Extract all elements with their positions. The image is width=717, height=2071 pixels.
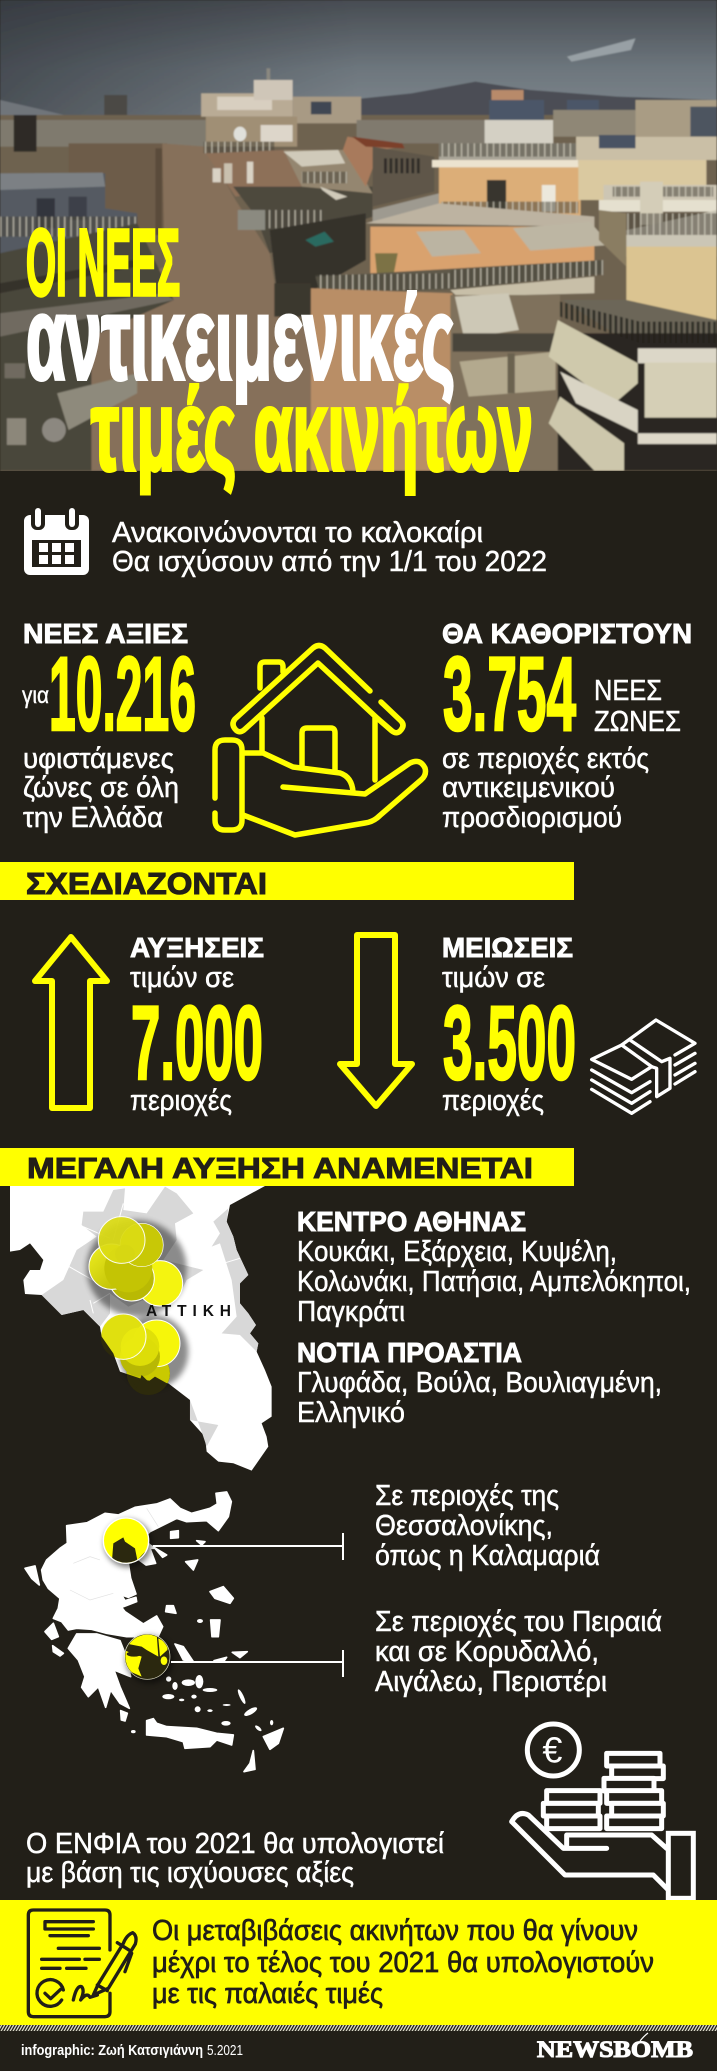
decorative hatch strip: [0, 2025, 717, 2031]
panel: new zones: 3.754: [443, 636, 576, 753]
text: central Athens and southern suburbs: [297, 1206, 691, 1429]
text: Thessaloniki areas: όπως η Καλαμαριά: [375, 1540, 600, 1572]
panel: new zones: προσδιορισμού: [442, 802, 622, 834]
icon: hand with euro coins: [512, 1724, 693, 1898]
logo: Newsbomb: NEWSBOMB: [537, 2037, 693, 2062]
text: ENFIA note: Ο ΕΝΦΙΑ του 2021 θα υπολογιστεί: [26, 1828, 445, 1860]
text: central Athens and southern suburbs: Κουκάκι, Εξάρχεια, Κυψέλη,: [297, 1236, 617, 1268]
panel: decreases: ΜΕΙΩΣΕΙΣ: [442, 932, 573, 963]
panel: new values: ζώνες σε όλη: [23, 772, 179, 804]
panel: new zones: ΘΑ ΚΑΘΟΡΙΣΤΟΥΝ: [442, 618, 692, 649]
panel: increases: περιοχές: [130, 1085, 232, 1117]
leader line: Thessaloniki: [153, 1533, 343, 1560]
arrow: down: [340, 935, 412, 1106]
map: Greece: [25, 1492, 283, 1772]
icon: stack of banknotes: [592, 1020, 695, 1113]
announcement text: Ανακοινώνονται το καλοκαίρι: [112, 517, 483, 549]
text: central Athens and southern suburbs: ΚΕΝΤΡΟ ΑΘΗΝΑΣ: [297, 1206, 526, 1237]
panel: new zones: αντικειμενικού: [442, 772, 615, 804]
text: Piraeus areas: Αιγάλεω, Περιστέρι: [375, 1666, 607, 1698]
panel: new values: [22, 618, 196, 834]
panel: new zones: ΝΕΕΣ: [594, 675, 662, 707]
announcement text: Θα ισχύσουν από την 1/1 του 2022: [112, 546, 547, 578]
leader line: Piraeus: [171, 1650, 343, 1677]
text: central Athens and southern suburbs: Παγκράτι: [297, 1296, 405, 1328]
text: central Athens and southern suburbs: Γλυφάδα, Βούλα, Βουλιαγμένη,: [297, 1367, 662, 1399]
text: Thessaloniki areas: Θεσσαλονίκης,: [375, 1510, 553, 1542]
text: central Athens and southern suburbs: ΝΟΤΙΑ ΠΡΟΑΣΤΙΑ: [297, 1337, 522, 1368]
panel: decreases: τιμών σε: [442, 962, 545, 994]
infographic canvas: 10.216: [49, 636, 196, 753]
icon: calendar: [24, 506, 89, 575]
panel: increases: [130, 932, 264, 1117]
heading band: big increase expected: [0, 1148, 574, 1186]
panel: new zones: ΖΩΝΕΣ: [594, 706, 681, 738]
panel: decreases: περιοχές: [442, 1085, 544, 1117]
heading band: big increase expected: ΜΕΓΑΛΗ ΑΥΞΗΣΗ ΑΝΑΜΕΝΕΤΑΙ: [27, 1153, 533, 1185]
panel: increases: τιμών σε: [130, 962, 234, 994]
panel: decreases: [442, 932, 576, 1117]
panel: new values: υφιστάμενες: [23, 743, 174, 775]
panel: property transfers note: με τις παλαιές τιμές: [152, 1978, 383, 2010]
map: Attica with highlighted areas: [10, 1186, 272, 1471]
text: Piraeus areas: Σε περιοχές του Πειραιά: [375, 1606, 662, 1638]
text: ENFIA note: [26, 1828, 445, 1889]
heading band: planned: [0, 862, 574, 901]
text: Piraeus areas: και σε Κορυδαλλό,: [375, 1636, 599, 1668]
panel: new values: ΝΕΕΣ ΑΞΙΕΣ: [23, 618, 188, 649]
panel: new zones: [442, 618, 692, 834]
arrow: up: [35, 937, 107, 1108]
credit: infographic: Ζωή Κατσιγιάννη: [21, 2043, 203, 2059]
text: Piraeus areas: [375, 1606, 662, 1698]
heading band: planned: ΣΧΕΔΙΑΖΟΝΤΑΙ: [26, 866, 267, 901]
text: central Athens and southern suburbs: Ελληνικό: [297, 1397, 405, 1429]
panel: decreases: 3.500: [443, 985, 576, 1102]
panel: new zones: σε περιοχές εκτός: [442, 743, 649, 775]
icon: house on hand: [215, 646, 426, 835]
text: Thessaloniki areas: [375, 1480, 600, 1572]
title: [26, 210, 533, 495]
panel: property transfers note: μέχρι το τέλος του 2021 θα υπολογιστούν: [152, 1947, 654, 1979]
panel: new values: για: [22, 682, 49, 708]
panel: property transfers note: [0, 1900, 717, 2025]
map label: Attica: ΑΤΤΙΚΗ: [146, 1303, 231, 1320]
text: ENFIA note: με βάση τις ισχύουσες αξίες: [26, 1857, 354, 1889]
header photo: rooftops of Athens: [0, 0, 717, 472]
text: Thessaloniki areas: Σε περιοχές της: [375, 1480, 559, 1512]
title: ΟΙ ΝΕΕΣ: [26, 210, 180, 316]
icon: signed contract: [28, 1910, 136, 2017]
panel: property transfers note: Οι μεταβιβάσεις ακινήτων που θα γίνουν: [152, 1915, 638, 1947]
icon: hand with euro coins: €: [542, 1730, 562, 1771]
panel: increases: 7.000: [131, 985, 263, 1102]
panel: new values: την Ελλάδα: [23, 802, 163, 834]
announcement text: [112, 517, 547, 578]
credit: 5.2021: [207, 2043, 243, 2059]
panel: increases: ΑΥΞΗΣΕΙΣ: [130, 932, 264, 963]
